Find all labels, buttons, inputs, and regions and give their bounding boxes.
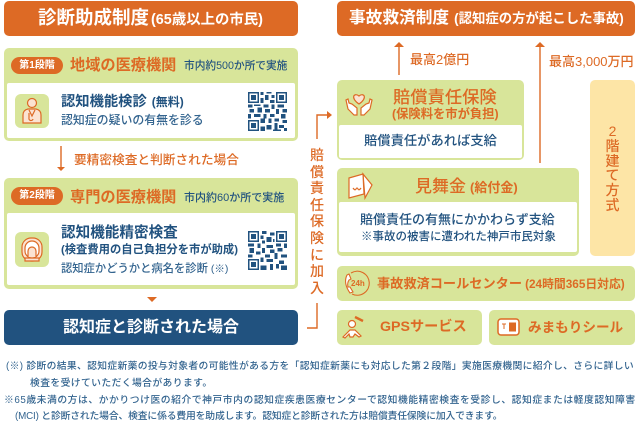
icon: GPS person <box>342 316 364 339</box>
stage 1 exam description: 認知症の疑いの有無を診る <box>61 113 204 127</box>
footnote 2 line 2: (MCI) と診断された場合、検査に係る費用を助成します。認知症と診断された方は賠償責任保険に加入できます。 <box>15 411 502 422</box>
white box <box>339 125 522 158</box>
stage 2 white box <box>7 213 295 285</box>
stage 2 title: 専門の医療機関 <box>70 189 176 206</box>
icon: doctor <box>15 94 49 128</box>
vertical label: 2階建て方式 <box>606 123 620 213</box>
label: max 30 million yen: 最高3,000万円 <box>549 54 634 69</box>
stage 2 exam subsidy note: (検査費用の自己負担分を市が助成) <box>61 244 238 256</box>
panel: condolence payment <box>337 168 579 256</box>
header text: 事故救済制度 (認知症の方が起こした事故) <box>349 8 624 27</box>
icon: 24h phone: 24h <box>351 279 365 288</box>
banner: diagnosed with dementia <box>4 310 298 345</box>
arrow: up to 30 million yen <box>535 42 545 163</box>
title: みまもりシール <box>528 320 623 335</box>
connector: join liability insurance <box>307 111 332 329</box>
arrow: stage 1 to stage 2 <box>57 146 65 171</box>
title: 事故救済コールセンター (24時間365日対応) <box>377 276 625 291</box>
vertical label: 賠償責任保険に加入 <box>310 147 324 296</box>
QR code 2 <box>248 231 287 270</box>
panel: GPS service <box>337 310 482 345</box>
stage 1 badge <box>11 57 63 74</box>
arrow label: detailed exam needed: 要精密検査と判断された場合 <box>74 153 239 167</box>
stage 1 white box <box>7 83 295 138</box>
panel: stage 2 <box>4 178 298 289</box>
description: 賠償責任の有無にかかわらず支給 <box>360 212 555 227</box>
note: ※事故の被害に遭われた神戸市民対象 <box>361 231 556 243</box>
header: accident relief <box>337 1 635 36</box>
title: 見舞金 (給付金) <box>415 177 518 196</box>
footnotes <box>4 360 636 422</box>
stage 2 location count: 市内約60か所で実施 <box>184 192 284 204</box>
white box <box>339 202 577 252</box>
stage 1 exam name: 認知機能検診 (無料) <box>61 94 184 110</box>
header: diagnosis subsidy <box>4 1 298 36</box>
label: max 200 million yen: 最高2億円 <box>410 52 469 67</box>
arrow: stage 2 to diagnosis <box>147 297 157 302</box>
arrow: up to 200 million yen <box>394 42 404 75</box>
title: 賠償責任保険 <box>393 87 497 107</box>
QR code 1 <box>248 92 287 131</box>
stage 1 badge: 第1段階 <box>19 60 55 71</box>
icon: envelope and card <box>348 172 373 200</box>
footnote 1 line 2: 検査を受けていただく場合があります。 <box>30 378 213 389</box>
title: GPSサービス <box>380 319 467 335</box>
panel: two-tier system <box>590 80 635 256</box>
footnote 2 line 1: ※65歳未満の方は、かかりつけ医の紹介で神戸市内の認知症疾患医療センターで認知機能精密検査を受診し、認知症または軽度認知障害 <box>4 395 636 406</box>
connector lines <box>307 111 332 329</box>
stage 2 badge: 第2段階 <box>19 190 55 201</box>
header text: 診断助成制度(65歳以上の市民) <box>38 7 263 28</box>
stage 2 badge <box>11 187 63 205</box>
icon: sticker <box>497 318 520 336</box>
icon: MRI scanner <box>15 232 49 267</box>
panel: watch-over sticker <box>489 310 635 345</box>
stage 2 exam description: 認知症かどうかと病名を診断 (※) <box>61 263 228 275</box>
footnote 1 line 1: (※) 診断の結果、認知症新薬の投与対象者の可能性がある方を「認知症新薬にも対応した第２段階」実施医療機関に紹介し、さらに詳しい <box>6 361 634 372</box>
stage 1 location count: 市内約500か所で実施 <box>184 60 287 72</box>
description: 賠償責任があれば支給 <box>364 133 497 148</box>
panel: liability insurance <box>337 80 524 160</box>
stage 2 exam name: 認知機能精密検査 <box>61 225 178 241</box>
icon: 24h phone <box>345 270 370 296</box>
stage 1 title: 地域の医療機関 <box>70 57 176 74</box>
subtitle: (保険料を市が負担) <box>392 107 499 121</box>
banner text: 認知症と診断された場合 <box>63 319 239 336</box>
panel: call center <box>337 266 635 301</box>
panel: stage 1 <box>4 48 298 141</box>
icon: hands holding heart <box>345 94 373 116</box>
